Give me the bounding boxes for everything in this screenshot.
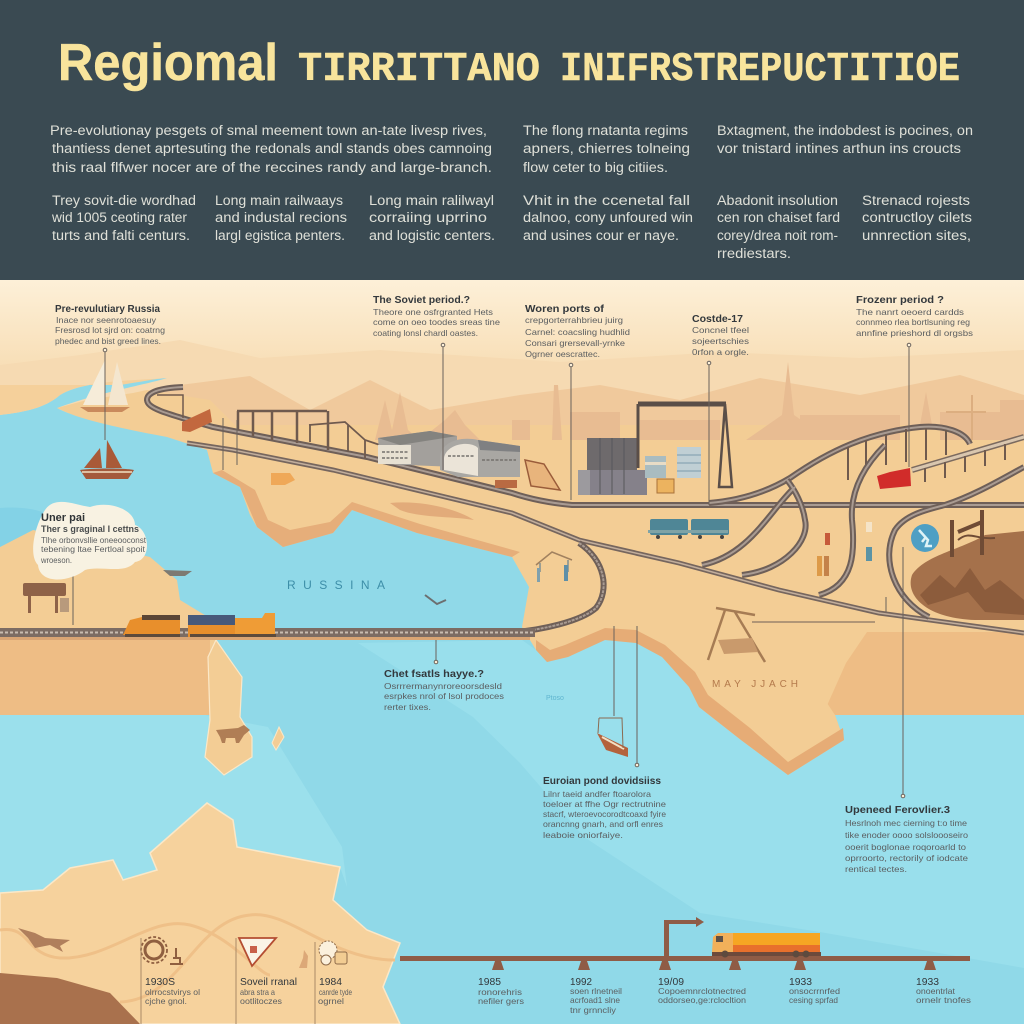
arch with figures <box>536 552 572 582</box>
peninsula shadow <box>536 628 844 775</box>
power plant block <box>578 438 647 495</box>
header column 3 <box>369 193 495 243</box>
callout: Castle-17: Concnel tfeel <box>692 325 749 335</box>
callout: Euroian pond: toeloer at ffhe Ogr rectrutnine <box>543 799 666 809</box>
timeline item: 1992: tnr grnncliy <box>570 1005 617 1015</box>
wooden swing structure <box>708 608 875 662</box>
rail: branches <box>702 445 1024 617</box>
callout: Woren ports: Consari grersevall-yrnke <box>525 338 625 348</box>
sand spit behind loop <box>57 390 240 437</box>
wood bench on left <box>23 583 69 613</box>
lower left tan band <box>0 640 210 715</box>
header band <box>0 0 1024 280</box>
timeline item: Soviet transit: Soveil rranal <box>240 977 297 988</box>
callout: Woren ports <box>525 303 630 359</box>
gantry arch <box>157 395 380 458</box>
timeline item: 1992: soen rlnetneil <box>570 986 622 996</box>
header column 1: turts and falti centurs. <box>52 228 190 243</box>
callout: Woren ports: Ogrner oescrattec. <box>525 349 600 359</box>
callout: Upened Ferovller: Hesrlnoh mec cierning t:o time <box>845 818 967 828</box>
callout: Chief fuels: Chet fsatls hayye.? <box>384 668 484 680</box>
header text right: rrediestars. <box>717 246 791 261</box>
callout: Soviet period: The Soviet period.? <box>373 294 470 306</box>
bridge: right trestle <box>912 437 1024 482</box>
header column 2: Long main railwaays <box>215 193 343 208</box>
distant city silhouette <box>375 362 1024 440</box>
timeline item: Soviet transit: abra stra a <box>240 987 275 997</box>
timeline item: 1992: acrfoad1 slne <box>570 995 620 1005</box>
lower land island <box>205 640 252 775</box>
header text middle: The flong rnatanta regims <box>523 123 688 138</box>
icon: blue location badge <box>911 524 939 552</box>
callout: cloud river panel: wroeson. <box>40 555 72 565</box>
callout: Frozen period: Frozenr period ? <box>856 294 944 306</box>
bottom left land <box>0 803 400 1024</box>
rail: horizontal crossing line <box>0 628 535 637</box>
header text middle: flow ceter to big citiies. <box>523 160 668 175</box>
callout: pre-revolutionary Russia: Pre-revulutiary Russia <box>55 303 160 315</box>
timeline item: 1992: 1992 <box>570 977 592 988</box>
header column 3: and logistic centers. <box>369 228 495 243</box>
scaffold sign <box>525 460 560 490</box>
timeline item: 1933 <box>789 977 840 1005</box>
timeline arrow <box>664 917 704 958</box>
header column 3: Long main ralilwayl <box>369 193 494 208</box>
callout: Frozen period: The nanrt oeoerd cardds <box>856 307 964 317</box>
timeline item: 1933 right: 1933 <box>916 977 939 988</box>
callout: Upened Ferovller: oprroorto, rectorily of iodcate <box>845 853 968 863</box>
small figures and markers <box>817 522 872 576</box>
header text middle: apners, chierres tolneing <box>523 141 690 156</box>
header text right: Bxtagment, the indobdest is pocines, on <box>717 123 973 138</box>
timeline item: 1930s: olrrocstvirys ol <box>145 987 200 997</box>
rail: lower main line <box>187 443 1024 633</box>
timeline item: 1992 <box>570 977 622 1015</box>
header text right <box>717 123 973 261</box>
header text middle <box>523 123 693 243</box>
timeline item: 1930s <box>145 977 200 1006</box>
map label: May Jjach: MAY JJACH <box>712 679 798 690</box>
timeline item: 1933 right: ornelr tnofes <box>916 995 971 1005</box>
timeline item: 1984: ogrnel <box>318 996 344 1006</box>
timeline item: 1930s: cjche gnol. <box>145 996 187 1006</box>
callout: Chief fuels: Osrrrermanynroreoorsdesld <box>384 681 502 691</box>
timeline item: 1984: canrde tyde <box>319 987 352 997</box>
main water body <box>0 378 1024 1024</box>
callout: Upened Ferovller: rentical tectes. <box>845 864 907 874</box>
small boat <box>163 570 192 576</box>
sky <box>0 280 1024 430</box>
timeline item: 1985 <box>478 977 524 1006</box>
header text right: contructloy cilets <box>862 210 972 225</box>
header column 1: wid 1005 ceoting rater <box>51 210 187 225</box>
timeline item: 1909: 19/09 <box>658 977 684 988</box>
callout: Euroian pond: Lilnr taeid andfer ftoarolora <box>543 789 651 799</box>
rail: loop to horizontal line <box>515 543 604 632</box>
timeline item: 1985: ronorehris <box>478 987 522 997</box>
header text right: Strenacd rojests <box>862 193 970 208</box>
callout: Soviet period: Theore one osfrgranted Hets <box>373 307 493 317</box>
land <box>0 425 1024 725</box>
sandy band under rail <box>0 637 530 640</box>
callout: Upened Ferovller <box>845 804 968 874</box>
bird <box>425 595 446 604</box>
callout: cloud river panel: Uner pai <box>41 512 85 524</box>
sand shelf shadow along coast <box>213 470 520 557</box>
icon: small figure <box>299 950 308 968</box>
timeline item: 1930s: 1930S <box>145 977 175 988</box>
small islet <box>272 727 284 750</box>
callout: Euroian pond: leaboie oniorfaiye. <box>543 830 623 840</box>
header column 2: largl egistica penters. <box>215 228 345 243</box>
header text middle: and usines cour er naye. <box>523 228 679 243</box>
small freight wagon <box>495 480 517 488</box>
timeline bar <box>400 956 970 970</box>
icon: gear with stamp <box>141 937 183 964</box>
title <box>58 34 960 93</box>
header column 1: Trey sovit-die wordhad <box>52 193 196 208</box>
header intro text left: this raal flfwer nocer are of the reccines randy and large-branch. <box>52 160 492 175</box>
header text right: cen ron chaiset fard <box>717 210 840 225</box>
map label: small: Ptoso <box>546 695 564 702</box>
callout: Woren ports: crepgorterrahbrieu juirg <box>525 315 623 325</box>
callout: Castle-17 <box>692 313 749 357</box>
header text right: Abadonit insolution <box>717 193 838 208</box>
callout: Euroian pond: orancnng gnarh, and orfl enres <box>543 819 663 829</box>
sailboat brown <box>80 440 134 479</box>
timeline item: 1933 right <box>916 977 971 1005</box>
timeline dividers <box>141 938 315 1024</box>
truck <box>712 933 821 958</box>
callout: Euroian pond: stacrf, wteroevocorodtcoaxd fyire <box>543 809 666 819</box>
peninsula land <box>699 700 844 775</box>
callout: Frozen period: connmeo rlea bortlsuning reg <box>856 317 970 327</box>
title: Regiomal <box>58 34 278 92</box>
callout: cloud river panel <box>33 502 147 580</box>
callout: pre-revolutionary Russia <box>55 303 165 346</box>
lighter sea zone east <box>358 640 1024 968</box>
lighter sea zone west <box>0 715 347 893</box>
brown mountain mine <box>911 510 1024 620</box>
rail: upper line with loop <box>147 387 1024 505</box>
distant mountains <box>0 340 1024 470</box>
small red locomotive left <box>182 409 212 432</box>
brown hills bottom left <box>0 973 140 1024</box>
callout: Upened Ferovller: Upeneed Ferovlier.3 <box>845 804 950 816</box>
river spit sand <box>0 378 167 415</box>
animal on island <box>216 725 250 743</box>
callout: Castle-17: Costde-17 <box>692 313 743 325</box>
callout: cloud river panel: Ther s graginal I cettns <box>41 524 139 534</box>
factories <box>378 431 520 477</box>
timeline item: 1985: nefiler gers <box>478 996 524 1006</box>
timeline item: 1933 right: onoentrlat <box>916 986 956 996</box>
header intro text left: Pre-evolutionay pesgets of smal meement town an-tate livesp rives, <box>50 123 487 138</box>
header column 2 <box>215 193 347 243</box>
right tan band <box>825 632 1024 715</box>
header intro text left: thantiess denet aprtesuting the redonals andl stands obes camnoing <box>52 141 492 156</box>
timeline item: 1933: onsocrrnrfed <box>789 986 840 996</box>
timeline item: 1909 <box>658 977 746 1005</box>
timeline item: 1984 <box>318 977 352 1006</box>
blue wagons <box>648 519 729 539</box>
header text right: unnrection sites, <box>862 228 971 243</box>
timeline item: Soviet transit: ootlitoczes <box>240 996 282 1006</box>
header text right: corey/drea noit rom- <box>717 228 838 243</box>
callout: Soviet period: come on oeo toodes sreas tine <box>373 317 500 327</box>
timeline item: 1909: oddorseo,ge:rclocltion <box>658 995 746 1005</box>
map label: Russina: RUSSINA <box>287 578 385 592</box>
rail: overpass curve <box>709 427 970 503</box>
header column 2: and industal recions <box>215 210 347 225</box>
timeline item: 1985: 1985 <box>478 977 501 988</box>
timeline item: 1933: cesing sprfad <box>789 995 838 1005</box>
icon: cloud and barrels <box>319 941 347 965</box>
sailboat white <box>80 360 130 412</box>
callout: Castle-17: 0rfon a orgle. <box>692 347 749 357</box>
boat on lower water <box>597 718 628 757</box>
callout: Castle-17: sojeertschies <box>692 336 749 346</box>
callout: cloud river panel: tebening ltae Fertloal spoit <box>41 544 146 554</box>
callout: Chief fuels: esrpkes nrol of lsol prodoces <box>384 691 504 701</box>
icon: warning pennant <box>239 938 276 966</box>
callout: Chief fuels: rerter tixes. <box>384 702 431 712</box>
callout: Upened Ferovller: tike enoder oooo solsloooseiro <box>845 830 968 840</box>
header column 3: corraiing uprrino <box>369 210 487 225</box>
water depth contours <box>0 507 57 547</box>
red locomotive <box>877 468 911 489</box>
callout: Woren ports: Carnel: coacsling hudhlid <box>525 327 630 337</box>
title: INIFRSTREPUCTITIOE <box>560 47 960 93</box>
title: TIRRITTANO <box>298 47 540 93</box>
callout: Frozen period <box>856 294 973 338</box>
callout: Frozen period: annfine prieshord dl orgsbs <box>856 328 973 338</box>
callout: Woren ports: Woren ports of <box>525 303 605 315</box>
callout: cloud river panel: Tlhe orbonvsllie oneeooconst <box>41 535 147 545</box>
timeline item: 1909: Copoemnrclotnectred <box>658 986 746 996</box>
header text right: vor tnistard intines arthun ins croucts <box>717 141 961 156</box>
winding roads bottom left <box>0 915 395 1002</box>
header text middle: dalnoo, cony unfoured win <box>523 210 693 225</box>
header intro text left <box>50 123 492 175</box>
pin lines <box>71 343 911 798</box>
callout: Upened Ferovller: ooerit boglonae roqoroarld to <box>845 842 966 852</box>
sand patch <box>390 502 474 520</box>
callout: pre-revolutionary Russia: Fresrosd lot sjrd on: coatrng <box>55 325 165 335</box>
callout: Soviet period <box>373 294 500 338</box>
gantry crane <box>638 404 732 487</box>
callout: pre-revolutionary Russia: Inace nor seenrotoaesuy <box>56 315 157 325</box>
timeline item: Soviet transit <box>240 977 297 1006</box>
timeline item: 1984: 1984 <box>319 977 342 988</box>
header text middle: Vhit in the ccenetal fall <box>523 193 690 208</box>
callout: Chief fuels <box>384 668 504 712</box>
tanks and blue building <box>645 447 701 493</box>
callout: Soviet period: coating lonsl chardl oastes. <box>373 328 478 338</box>
small orange sign on sand <box>271 473 295 485</box>
callout: Euroian pond: Euroian pond dovidsiiss <box>543 775 661 787</box>
icon: plane silhouette <box>18 928 70 952</box>
timeline item: 1933: 1933 <box>789 977 812 988</box>
header column 1 <box>51 193 196 243</box>
callout: Euroian pond <box>543 775 666 840</box>
orange locomotive train <box>123 613 276 637</box>
callout: pre-revolutionary Russia: phedec and bist greed lines. <box>55 336 161 346</box>
